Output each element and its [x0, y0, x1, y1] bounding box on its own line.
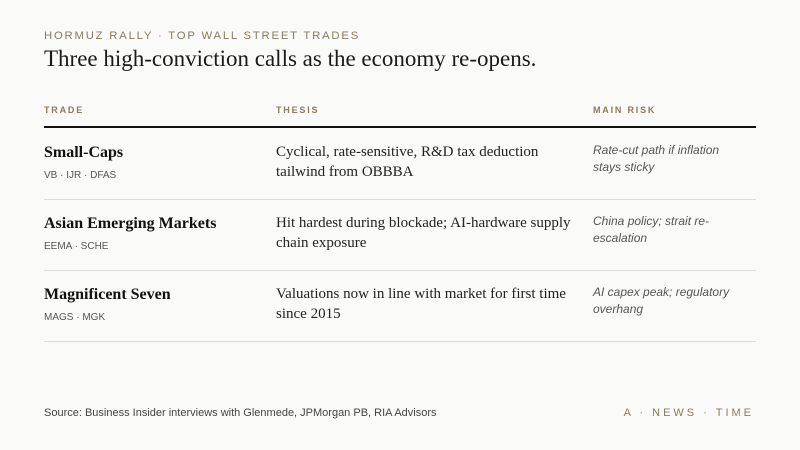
trade name: Magnificent Seven [44, 286, 171, 303]
header: thesis: THESIS [276, 105, 319, 115]
risk text: China policy; strait re-escalation [593, 214, 709, 245]
risk text: AI capex peak; regulatory overhang [593, 285, 729, 316]
row: magnificent seven [44, 270, 756, 342]
title: Three high-conviction calls as the economy re-opens. [44, 46, 536, 71]
header: main risk: MAIN RISK [593, 105, 656, 115]
tickers: EEMA · SCHE [44, 241, 108, 252]
thesis text: Cyclical, rate-sensitive, R&D tax deduction tailwind from OBBBA [276, 144, 538, 180]
tickers: MAGS · MGK [44, 312, 105, 323]
header: trade: TRADE [44, 105, 84, 115]
trade name: Asian Emerging Markets [44, 215, 216, 232]
row: small-caps [44, 128, 756, 200]
eyebrow: HORMUZ RALLY · TOP WALL STREET TRADES [44, 30, 360, 42]
brand: A · NEWS · TIME [624, 407, 754, 419]
risk text: Rate-cut path if inflation stays sticky [593, 143, 719, 174]
tickers: VB · IJR · DFAS [44, 170, 116, 181]
trade name: Small-Caps [44, 144, 123, 161]
thesis text: Hit hardest during blockade; AI-hardware supply chain exposure [276, 215, 570, 251]
thesis text: Valuations now in line with market for first time since 2015 [276, 286, 566, 322]
row: asian emerging markets [44, 199, 756, 271]
source: Source: Business Insider interviews with Glenmede, JPMorgan PB, RIA Advisors [44, 407, 437, 419]
